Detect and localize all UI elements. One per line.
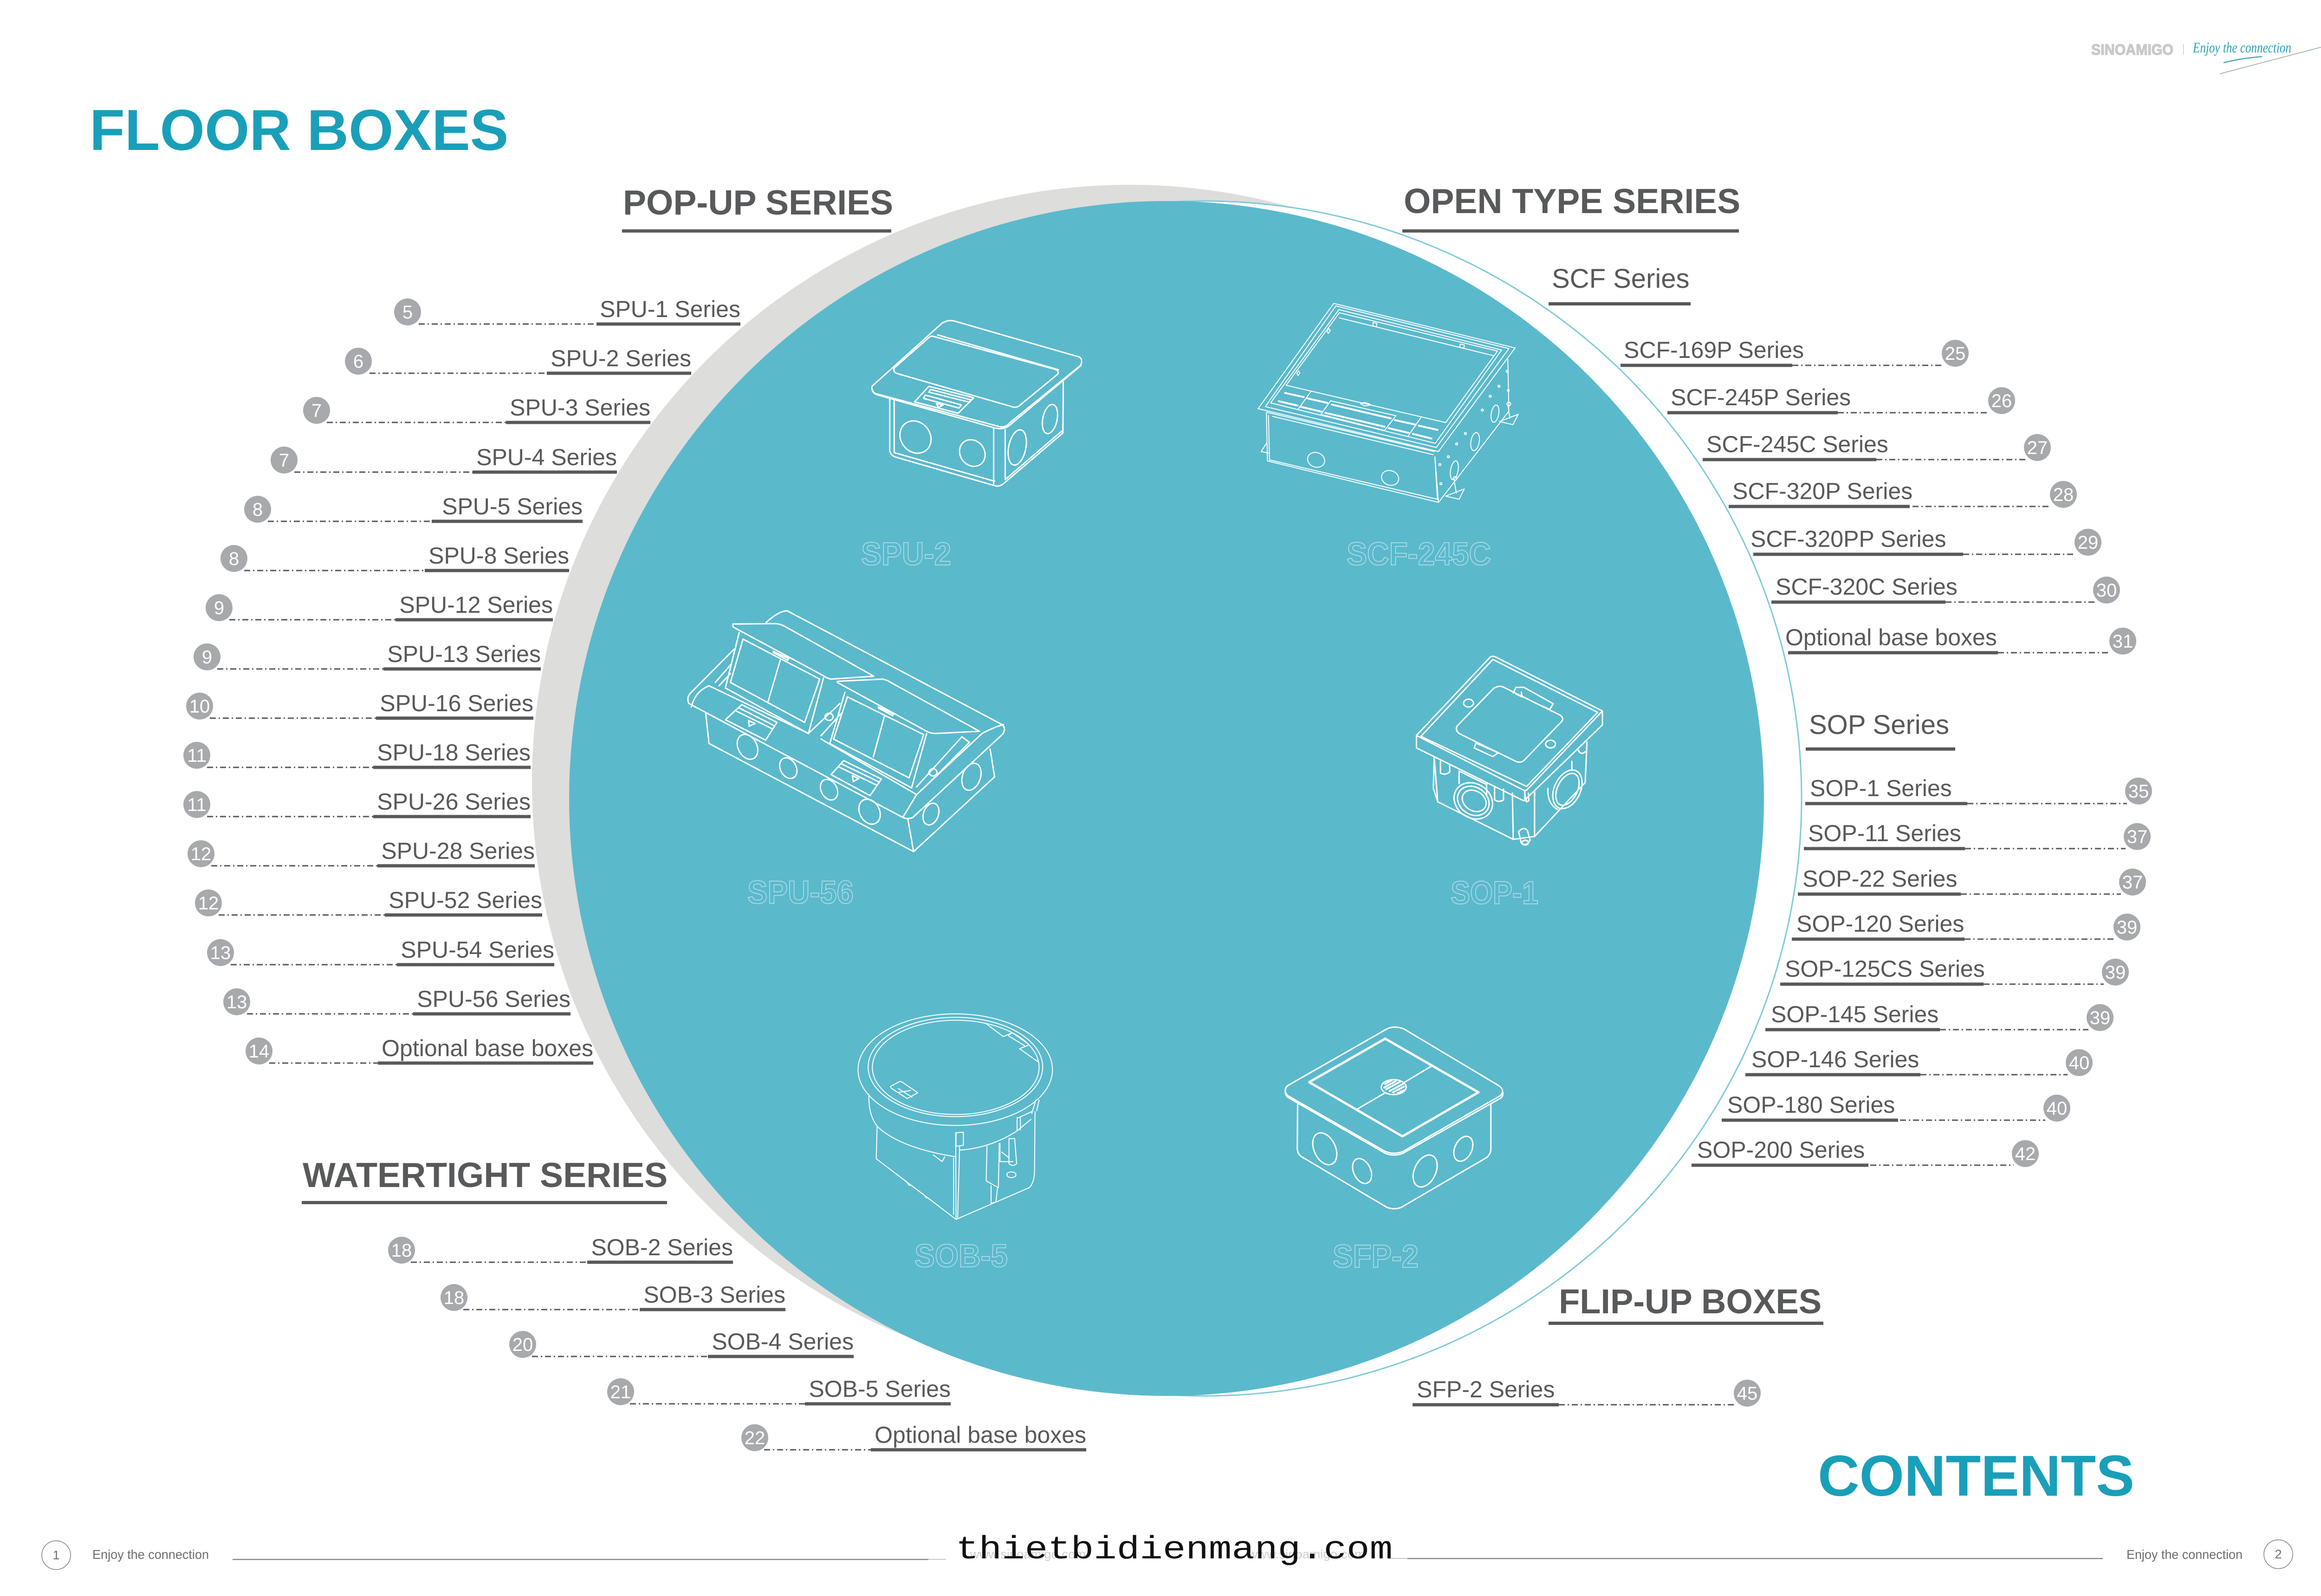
row: SOB-3 Series: SOB-3 Series [643, 1282, 785, 1308]
row: SPU-16 Series: 10 [189, 696, 210, 717]
row: SCF-320PP Series [1750, 526, 2101, 556]
row: SPU-1 Series: 5 [402, 302, 413, 323]
heading: flip-up boxes: FLIP-UP BOXES [1559, 1282, 1822, 1321]
row: SOP-120 Series [1792, 911, 2140, 941]
row: SOP-120 Series: 39 [2117, 917, 2137, 938]
row: SPU-18 Series: SPU-18 Series [377, 740, 531, 766]
row: SPU-26 Series: 11 [187, 795, 207, 815]
row: SFP-2 Series [1413, 1376, 1761, 1407]
row: SOB-4 Series: SOB-4 Series [712, 1329, 854, 1355]
row: SOP-200 Series [1692, 1137, 2039, 1167]
subheading: SOP series: SOP Series [1809, 710, 1949, 740]
row: SCF-245C Series: SCF-245C Series [1706, 431, 1888, 457]
row: SOP-1 Series [1805, 775, 2152, 805]
row: SPU-52 Series [195, 887, 542, 916]
row: SPU-2 Series: SPU-2 Series [551, 345, 691, 371]
watermark: thietbidienmang.com: thietbidienmang.com [956, 1532, 1393, 1569]
icon: SOB-5 round floor box [858, 1014, 1052, 1220]
logo: Sinoamigo brand [2091, 39, 2321, 74]
row: SPU-5 Series: SPU-5 Series [442, 493, 583, 519]
row: watertight optional base boxes: Optional base boxes [875, 1422, 1086, 1448]
icon: SPU-56 floor box [688, 611, 1005, 852]
icon: SOP-1 floor box [1416, 656, 1602, 845]
subheading: SOP series [1806, 710, 1955, 751]
row: SCF-320PP Series: 29 [2078, 532, 2098, 553]
row: SPU-5 Series: 8 [253, 500, 263, 520]
row: SOB-2 Series: SOB-2 Series [591, 1234, 733, 1260]
row: SPU-2 Series: 6 [353, 351, 363, 372]
row: SOB-4 Series: 20 [512, 1335, 533, 1355]
row: SOB-2 Series: 18 [391, 1240, 412, 1261]
row: SCF-320C Series [1771, 574, 2120, 603]
footer: left page number and tagline [42, 1541, 946, 1570]
row: SCF-320P Series [1729, 478, 2077, 508]
row: SCF-169P Series: 25 [1945, 344, 1965, 364]
row: SOP-146 Series: 40 [2069, 1053, 2089, 1073]
logo: Sinoamigo brand: SINOAMIGO [2091, 41, 2173, 58]
row: SOP-22 Series [1798, 866, 2146, 896]
footer: faint website addresses [970, 1547, 1365, 1561]
footer: left page number and tagline: Enjoy the connection [92, 1547, 209, 1562]
row: SOP-1 Series: SOP-1 Series [1810, 775, 1952, 801]
row: SPU-1 Series: SPU-1 Series [600, 296, 740, 322]
icon: SPU-2 floor box [872, 321, 1082, 486]
row: SPU-4 Series: SPU-4 Series [476, 444, 617, 470]
label: SPU-56: SPU-56 [747, 874, 854, 910]
row: SOP-125CS Series: SOP-125CS Series [1785, 956, 1985, 982]
row: SPU-3 Series [303, 395, 650, 424]
label: SCF-245C: SCF-245C [1347, 536, 1491, 572]
logo: Sinoamigo brand: Enjoy the connection [2192, 39, 2291, 56]
row: SPU-16 Series [186, 690, 533, 720]
row: pop-up optional base boxes [246, 1035, 593, 1065]
row: SCF-245C Series [1703, 431, 2051, 461]
background circle: gray offset [532, 185, 1727, 1380]
footer: faint website addresses: www.sinoamigo.com [970, 1547, 1086, 1561]
label: SOP-1: SOP-1 [1451, 875, 1538, 911]
row: SCF-245P Series [1667, 384, 2015, 414]
row: SOB-5 Series [607, 1376, 951, 1406]
row: SOP-200 Series: 42 [2015, 1144, 2036, 1164]
row: pop-up optional base boxes: Optional base boxes [382, 1035, 593, 1061]
row: SCF-245P Series: 26 [1991, 391, 2012, 411]
row: SPU-3 Series: 7 [311, 401, 322, 421]
title: contents: CONTENTS [1818, 1444, 2134, 1508]
row: SPU-56 Series: SPU-56 Series [417, 986, 571, 1012]
row: SOB-5 Series: SOB-5 Series [809, 1376, 951, 1402]
footer: right page number and tagline: 2 [2275, 1547, 2282, 1561]
row: SPU-12 Series [206, 592, 553, 621]
row: SPU-13 Series [194, 641, 541, 670]
row: SPU-8 Series: SPU-8 Series [428, 543, 569, 569]
row: SOB-3 Series: 18 [444, 1288, 464, 1308]
row: SOP-11 Series: SOP-11 Series [1808, 820, 1961, 846]
footer: left page number and tagline: 1 [52, 1548, 60, 1562]
footer: faint website addresses: www.sinoamigo.com [1248, 1547, 1365, 1561]
row: SCF optional base boxes: Optional base boxes [1785, 624, 1997, 650]
row: SOP-146 Series: SOP-146 Series [1751, 1046, 1919, 1072]
row: SOB-2 Series [388, 1234, 733, 1264]
row: SOP-125CS Series [1780, 956, 2129, 986]
row: pop-up optional base boxes: 14 [249, 1041, 269, 1062]
row: SPU-5 Series [244, 493, 583, 523]
row: SOP-1 Series: 35 [2128, 781, 2149, 802]
row: SCF optional base boxes: 31 [2113, 631, 2133, 652]
title: floor boxes: FLOOR BOXES [90, 98, 509, 162]
row: SOP-145 Series: SOP-145 Series [1771, 1001, 1938, 1027]
heading: watertight series: WATERTIGHT SERIES [303, 1155, 668, 1194]
subheading: SCF series [1549, 264, 1691, 305]
row: SOP-180 Series: 40 [2047, 1098, 2067, 1119]
row: SCF optional base boxes [1785, 624, 2136, 655]
row: SOP-180 Series: SOP-180 Series [1727, 1092, 1895, 1118]
subheading: SCF series: SCF Series [1552, 264, 1690, 294]
row: SFP-2 Series: SFP-2 Series [1417, 1376, 1555, 1402]
row: SPU-28 Series: 12 [191, 844, 211, 864]
row: SPU-8 Series: 8 [229, 549, 239, 569]
row: SOP-22 Series: SOP-22 Series [1802, 866, 1957, 892]
row: SPU-8 Series [220, 543, 569, 572]
row: SPU-54 Series [207, 937, 554, 967]
row: SPU-12 Series: 9 [214, 598, 224, 618]
row: SFP-2 Series: 45 [1737, 1383, 1757, 1404]
label: SPU-2: SPU-2 [861, 536, 951, 572]
row: SOB-4 Series [509, 1329, 854, 1358]
row: SPU-4 Series: 7 [279, 450, 289, 471]
row: SCF-169P Series: SCF-169P Series [1624, 337, 1804, 363]
row: SCF-320C Series: 30 [2096, 580, 2117, 601]
row: SPU-3 Series: SPU-3 Series [510, 395, 650, 421]
row: SPU-1 Series [394, 296, 740, 326]
footer: right page number and tagline: Enjoy the connection [2127, 1547, 2243, 1562]
row: SPU-52 Series: SPU-52 Series [389, 887, 542, 913]
row: SOP-11 Series: 37 [2127, 827, 2147, 847]
row: SOP-22 Series: 37 [2122, 872, 2143, 893]
row: SOP-11 Series [1804, 820, 2151, 850]
row: SCF-245C Series: 27 [2027, 438, 2048, 458]
row: SPU-52 Series: 12 [198, 893, 219, 914]
thin teal ring [607, 201, 1802, 1396]
row: SPU-2 Series [345, 345, 691, 375]
row: SPU-13 Series: SPU-13 Series [387, 641, 541, 667]
row: SPU-56 Series [223, 986, 571, 1016]
label: SOB-5: SOB-5 [914, 1238, 1008, 1274]
row: SCF-169P Series [1621, 337, 1969, 367]
row: SOP-180 Series [1722, 1092, 2070, 1122]
row: SCF-245P Series: SCF-245P Series [1671, 384, 1851, 410]
row: watertight optional base boxes: 22 [745, 1428, 765, 1448]
row: SCF-320P Series: 28 [2053, 485, 2074, 505]
row: SPU-13 Series: 9 [202, 647, 212, 668]
row: SCF-320PP Series: SCF-320PP Series [1750, 526, 1946, 552]
row: SPU-54 Series: SPU-54 Series [401, 937, 554, 963]
icon: SCF-245C floor box [1258, 304, 1518, 502]
row: SPU-16 Series: SPU-16 Series [380, 690, 533, 716]
row: SPU-18 Series [183, 740, 531, 769]
label: SFP-2: SFP-2 [1333, 1238, 1419, 1274]
main teal circle [569, 201, 1764, 1396]
row: SPU-26 Series: SPU-26 Series [377, 789, 531, 815]
row: SOB-3 Series [441, 1282, 785, 1311]
row: SCF-320C Series: SCF-320C Series [1776, 574, 1958, 600]
row: watertight optional base boxes [741, 1422, 1086, 1451]
row: SPU-54 Series: 13 [210, 943, 231, 963]
row: SCF-320P Series: SCF-320P Series [1732, 478, 1913, 504]
row: SOP-145 Series: 39 [2090, 1008, 2110, 1028]
row: SPU-26 Series [183, 789, 531, 818]
heading: pop-up series: POP-UP SERIES [623, 183, 893, 222]
row: SOP-125CS Series: 39 [2105, 962, 2126, 983]
row: SOP-200 Series: SOP-200 Series [1697, 1137, 1865, 1163]
row: SPU-28 Series [188, 838, 535, 867]
row: SOP-146 Series [1745, 1046, 2093, 1076]
row: SOP-120 Series: SOP-120 Series [1796, 911, 1964, 937]
heading: open type series: OPEN TYPE SERIES [1404, 182, 1740, 221]
row: SOP-145 Series [1765, 1001, 2114, 1032]
row: SPU-18 Series: 11 [187, 746, 207, 766]
row: SPU-12 Series: SPU-12 Series [399, 592, 553, 618]
row: SOB-5 Series: 21 [610, 1382, 631, 1402]
row: SPU-4 Series [271, 444, 617, 474]
footer: right page number and tagline [1389, 1540, 2293, 1569]
icon: SFP-2 floor box [1285, 1027, 1503, 1209]
row: SPU-28 Series: SPU-28 Series [381, 838, 535, 864]
row: SPU-56 Series: 13 [227, 992, 247, 1012]
